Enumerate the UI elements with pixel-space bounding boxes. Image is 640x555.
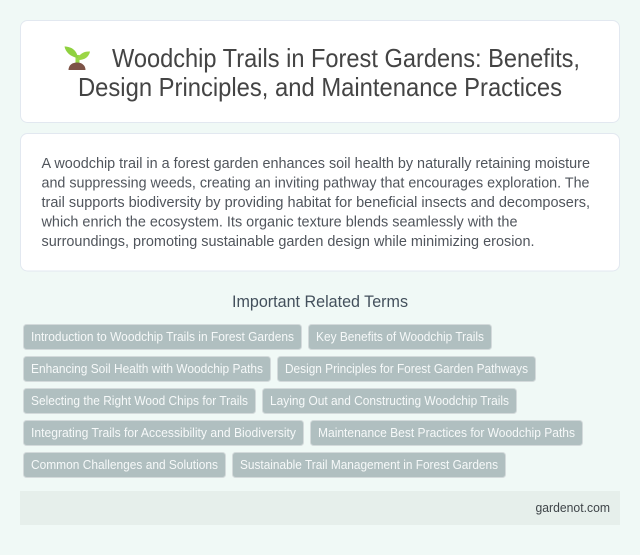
description text (41, 155, 590, 250)
tag: Laying Out and Constructing Woodchip Trails (270, 393, 509, 408)
title: Woodchip Trails in Forest Gardens: Benefits, (112, 43, 580, 73)
description text: which enrich the ecosystem. Its organic texture blends seamlessly with the (41, 214, 517, 230)
tag (24, 356, 270, 382)
icon: seedling (64, 46, 90, 70)
tag (310, 420, 582, 446)
footer (20, 491, 620, 525)
title: Design Principles, and Maintenance Practices (78, 72, 562, 102)
related terms tags (24, 324, 582, 478)
tag: Key Benefits of Woodchip Trails (316, 329, 484, 344)
tag (278, 356, 536, 382)
tag (262, 388, 516, 414)
tag (24, 452, 226, 478)
tag (232, 452, 506, 478)
tag: Sustainable Trail Management in Forest Gardens (240, 457, 498, 472)
title (78, 43, 580, 102)
tag: Selecting the Right Wood Chips for Trails (31, 393, 248, 408)
tag (24, 420, 304, 446)
panel: title card (20, 20, 620, 122)
tag: Enhancing Soil Health with Woodchip Paths (31, 361, 263, 376)
tag: Design Principles for Forest Garden Pathways (285, 361, 528, 376)
heading: important related terms: Important Related Terms (232, 292, 408, 311)
footer source text: gardenot.com (536, 501, 610, 515)
tag (24, 324, 302, 350)
tag: Introduction to Woodchip Trails in Forest Gardens (31, 329, 294, 344)
description text: trail supports biodiversity by providing habitat for beneficial insects and decomposers, (42, 194, 590, 211)
tag (308, 324, 492, 350)
description text: and suppressing weeds, creating an inviting pathway that encourages exploration. The (42, 174, 590, 192)
tag: Maintenance Best Practices for Woodchip Paths (318, 425, 575, 440)
description text: surroundings, promoting sustainable garden design while minimizing erosion. (42, 233, 534, 250)
tag: Integrating Trails for Accessibility and Biodiversity (31, 425, 296, 440)
panel: description card (20, 134, 620, 271)
description text: A woodchip trail in a forest garden enhances soil health by naturally retaining moisture (42, 155, 590, 172)
tag (24, 388, 256, 414)
tag: Common Challenges and Solutions (31, 457, 218, 472)
